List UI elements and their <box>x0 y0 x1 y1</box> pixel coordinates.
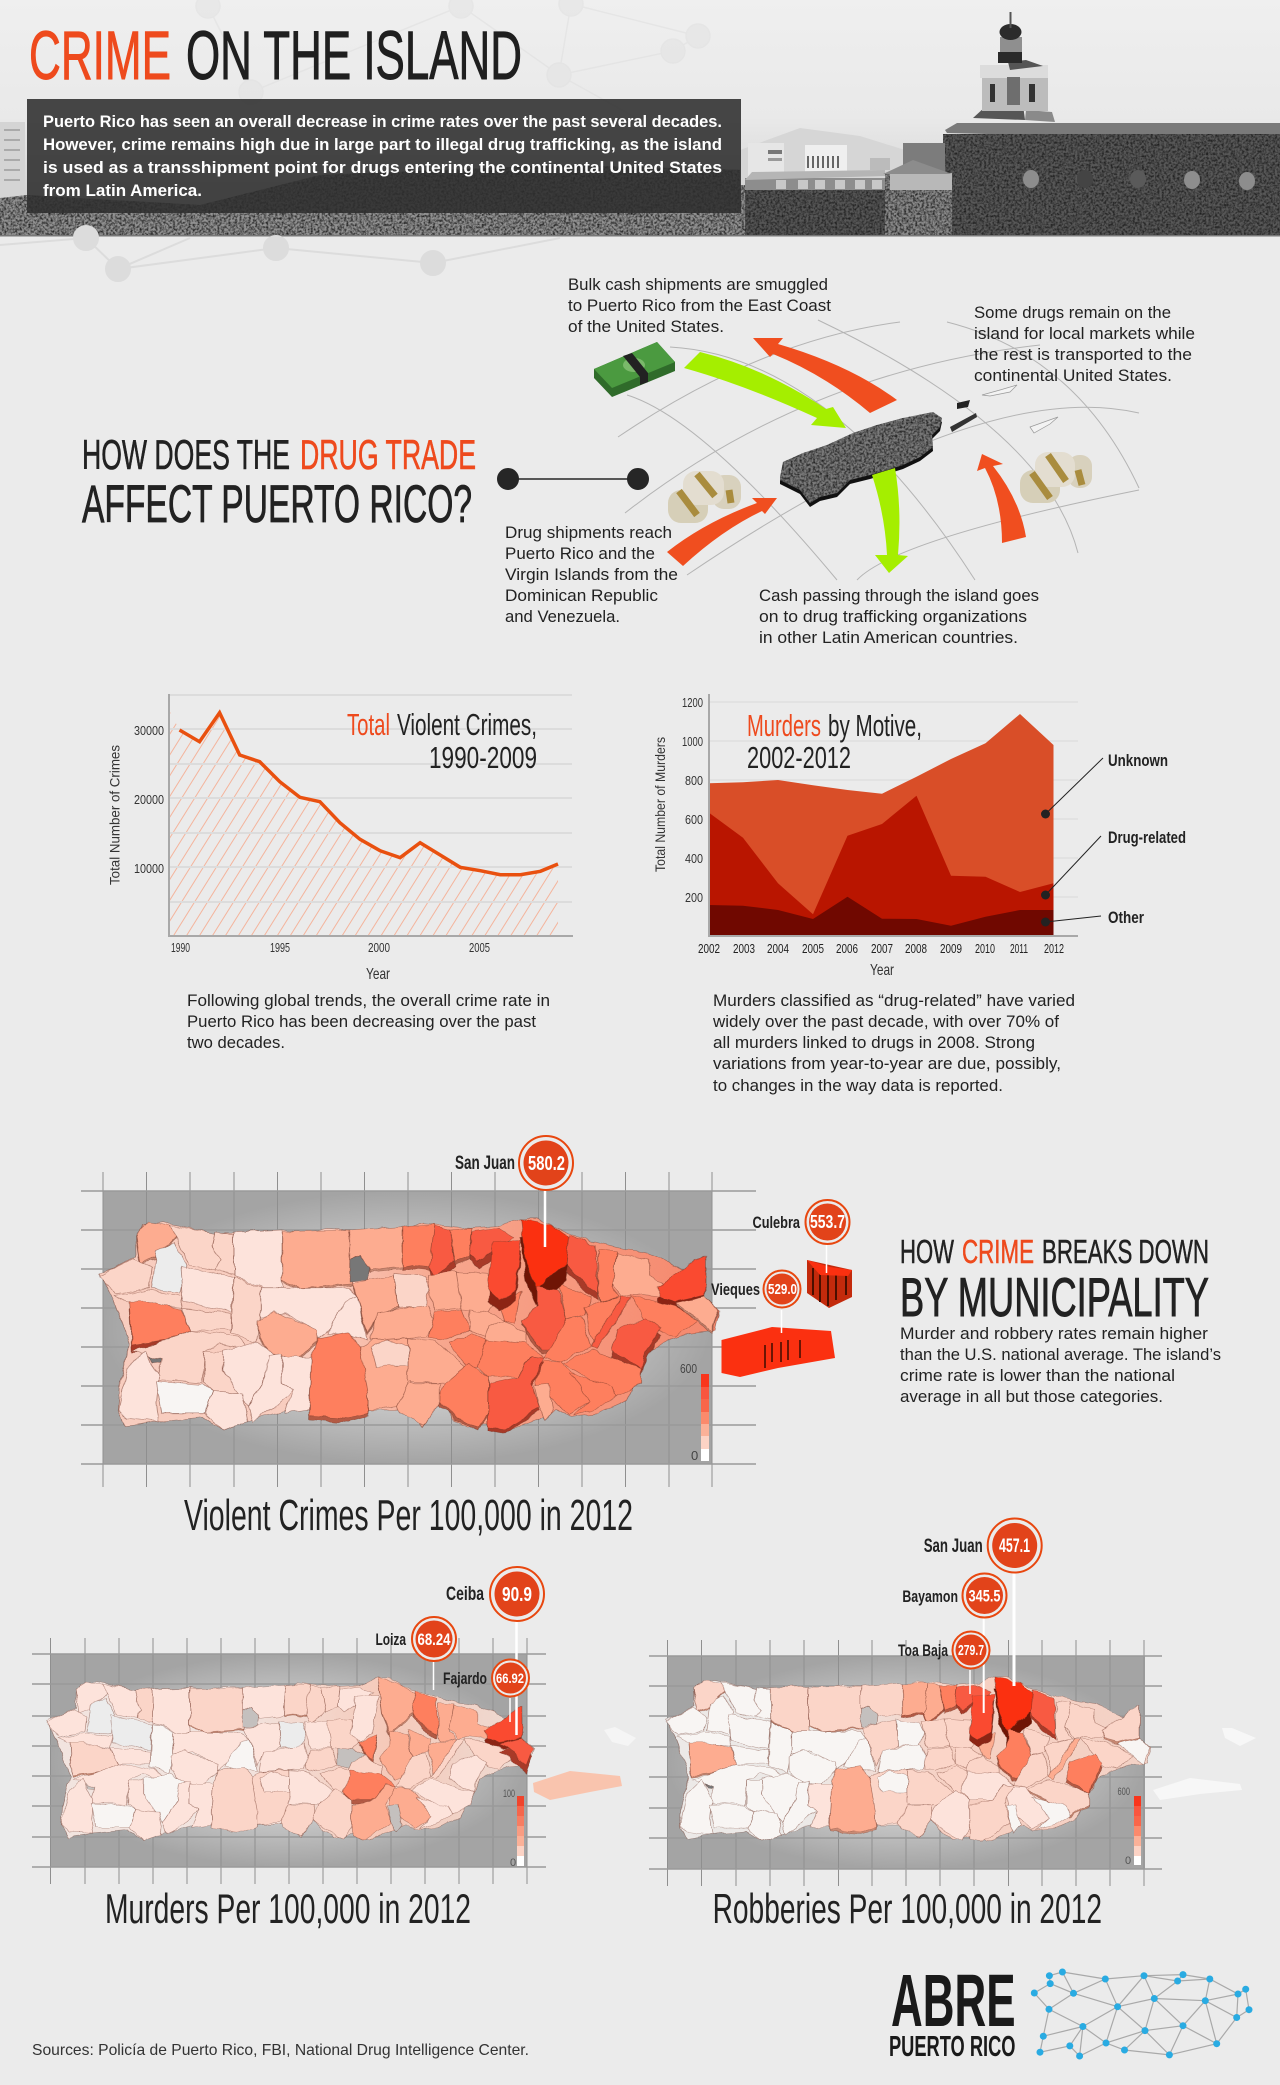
intro text box: from Latin America. <box>43 181 202 200</box>
line chart: total violent crimes: 1990-2009 <box>429 740 537 775</box>
Culebra robberies <box>1222 1728 1256 1746</box>
icon: network map of the island <box>1031 1968 1252 2060</box>
legend: 100 <box>503 1788 515 1800</box>
island of Puerto Rico <box>780 385 1058 507</box>
callout: Ceiba: 90.9 <box>502 1584 532 1606</box>
line chart: total violent crimes: Total <box>347 707 390 742</box>
area chart: murders by motive: Year <box>870 962 894 979</box>
text: some drugs: the rest is transported to the <box>974 346 1192 364</box>
text: some drugs <box>974 304 1195 385</box>
callout: San Juan violent crimes <box>455 1136 573 1247</box>
callout: Vieques: 529.0 <box>768 1281 797 1298</box>
header photo: fort and city <box>0 0 1280 236</box>
callout: unknown <box>1041 751 1168 818</box>
arrow: green cash outbound <box>872 468 908 573</box>
text: cash passing: on to drug trafficking organizations <box>759 608 1027 626</box>
text: cash passing <box>759 587 1039 647</box>
Vieques extruded <box>722 1327 835 1377</box>
Vieques murders <box>533 1771 622 1800</box>
line chart: total violent crimes: Total Number of Crimes <box>106 745 122 885</box>
logo: Abre Puerto Rico <box>889 1959 1252 2063</box>
line chart: total violent crimes: 2000 <box>368 940 390 955</box>
line chart: total violent crimes: Violent Crimes, <box>397 707 537 742</box>
text: chart 1 note: Puerto Rico has been decreasing over the past <box>187 1013 536 1031</box>
area chart: murders by motive: 2012 <box>1044 941 1064 956</box>
callout: Fajardo: Fajardo <box>443 1669 487 1688</box>
drug route map <box>594 320 1139 580</box>
area chart: murders by motive: 2009 <box>940 941 962 956</box>
left wall with crenels <box>745 170 887 236</box>
area chart: murders by motive: 2007 <box>871 941 893 956</box>
round bastion <box>883 160 952 236</box>
callout: San Juan robberies <box>924 1518 1042 1686</box>
callout: San Juan violent crimes: San Juan <box>455 1153 515 1174</box>
text: drug shipments: Virgin Islands from the <box>505 566 678 584</box>
heading: drug trade: HOW DOES THE <box>82 431 290 478</box>
title: CRIME <box>29 17 171 94</box>
area chart: murders by motive: 1200 <box>682 695 703 710</box>
arrow: red drugs north <box>977 454 1026 543</box>
callout: other <box>1041 908 1144 927</box>
callout: Loiza <box>376 1617 456 1690</box>
legend <box>680 1361 709 1463</box>
callout: San Juan robberies: 457.1 <box>999 1536 1030 1557</box>
callout: Toa Baja <box>898 1632 990 1694</box>
text: bulk cash: Bulk cash shipments are smuggled <box>568 276 828 294</box>
decorative network below header <box>0 226 560 281</box>
callout: San Juan robberies: San Juan <box>924 1536 983 1557</box>
callout: other: Other <box>1108 908 1144 927</box>
area chart: murders by motive: 800 <box>685 773 703 788</box>
text: drug shipments: and Venezuela. <box>505 608 620 626</box>
title <box>29 17 522 94</box>
text: cash passing: in other Latin American countries. <box>759 629 1018 647</box>
area chart: murders by motive: 2008 <box>905 941 927 956</box>
heading: by municipality: CRIME <box>962 1233 1034 1270</box>
area chart: murders by motive: 2004 <box>767 941 789 956</box>
text: chart 2 note: variations from year-to-year are due, possibly, <box>713 1055 1061 1073</box>
text: bulk cash: of the United States. <box>568 318 724 336</box>
arrow: red cash to coast <box>753 338 897 413</box>
heading: drug trade: AFFECT PUERTO RICO? <box>82 475 472 534</box>
text: some drugs: island for local markets while <box>974 325 1195 343</box>
line chart: total violent crimes: 1995 <box>270 940 290 955</box>
callout: Toa Baja: 279.7 <box>958 1642 984 1659</box>
callout: Ceiba: Ceiba <box>446 1584 484 1605</box>
arrow: green cash inbound <box>684 352 846 428</box>
area chart: murders by motive: 200 <box>685 890 703 905</box>
map panel: murders <box>32 1638 636 1884</box>
heading: by municipality: HOW <box>900 1233 955 1270</box>
area chart: murders by motive: 1000 <box>682 734 703 749</box>
text: municipality note: Murder and robbery rates remain higher <box>900 1325 1209 1343</box>
callout: Vieques: Vieques <box>711 1280 760 1299</box>
callout: Fajardo: 66.92 <box>496 1670 524 1686</box>
area chart: murders by motive: 2002-2012 <box>747 740 851 775</box>
text: municipality note <box>900 1325 1221 1406</box>
line chart: total violent crimes: 1990 <box>171 940 190 955</box>
callout: San Juan violent crimes: 580.2 <box>528 1153 565 1175</box>
legend: 0 <box>691 1448 698 1463</box>
Vieques robberies <box>1153 1778 1242 1800</box>
sources: Sources: Policía de Puerto Rico, FBI, National Drug Intelligence Center. <box>32 2042 529 2059</box>
text: municipality note: crime rate is lower than the national <box>900 1367 1175 1385</box>
line chart: total violent crimes: 30000 <box>134 723 164 738</box>
line chart: total violent crimes <box>106 694 573 983</box>
logo: Abre Puerto Rico: PUERTO RICO <box>889 2031 1016 2063</box>
text: some drugs: continental United States. <box>974 367 1172 385</box>
arrow: red drugs inbound <box>667 498 777 566</box>
text: cash passing: Cash passing through the island goes <box>759 587 1039 605</box>
main fort wall <box>903 123 1280 236</box>
legend: 0 <box>510 1857 516 1869</box>
text: municipality note: than the U.S. national average. The island’s <box>900 1346 1221 1364</box>
text: chart 1 note <box>187 992 550 1052</box>
heading: by municipality <box>900 1233 1209 1328</box>
area chart: murders by motive: by Motive, <box>828 708 922 743</box>
connector <box>498 468 648 490</box>
area: drug-related <box>709 796 1054 936</box>
callout: Loiza: Loiza <box>376 1630 406 1649</box>
text: chart 2 note <box>712 992 1075 1095</box>
text: drug shipments: Drug shipments reach <box>505 524 672 542</box>
map panel: robberies <box>649 1640 1256 1886</box>
line chart: total violent crimes: 10000 <box>134 861 164 876</box>
map title: robberies: Robberies Per 100,000 in 2012 <box>713 1885 1102 1932</box>
intro text box: is used as a transshipment point for drugs entering the continental United States <box>43 158 722 177</box>
left building and city strip <box>0 122 745 236</box>
text: chart 2 note: Murders classified as “drug-related” have varied <box>713 992 1075 1010</box>
area chart: murders by motive <box>652 694 1186 979</box>
text: chart 2 note: widely over the past decade, with over 70% of <box>712 1013 1059 1031</box>
area chart: murders by motive: Murders <box>747 708 821 743</box>
callout: Fajardo <box>443 1660 529 1722</box>
callout: Culebra <box>752 1200 850 1273</box>
area chart: murders by motive: 2003 <box>733 941 755 956</box>
Culebra extruded <box>807 1260 852 1308</box>
icon: drug bales right <box>1020 452 1092 503</box>
line chart: total violent crimes: Year <box>366 966 390 983</box>
icon: drug bales left <box>668 471 741 523</box>
legend: 600 <box>1118 1786 1130 1798</box>
area chart: murders by motive: 2010 <box>975 941 995 956</box>
callout: Bayamon: 345.5 <box>968 1586 1000 1606</box>
text: municipality note: average in all but those categories. <box>900 1388 1163 1406</box>
map title: violent crimes: Violent Crimes Per 100,000 in 2012 <box>184 1491 633 1540</box>
callout: Culebra: 553.7 <box>810 1212 845 1232</box>
legend <box>1118 1786 1141 1867</box>
legend <box>503 1788 524 1869</box>
title: ON THE ISLAND <box>186 17 522 94</box>
intro text box <box>27 99 741 213</box>
text: bulk cash: to Puerto Rico from the East Coast <box>568 297 831 315</box>
callout: Vieques <box>711 1270 800 1333</box>
line chart: total violent crimes: 2005 <box>469 940 490 955</box>
area chart: murders by motive: 600 <box>685 812 703 827</box>
text: chart 1 note: two decades. <box>187 1034 285 1052</box>
area chart: murders by motive: 2006 <box>836 941 858 956</box>
legend: 600 <box>680 1361 697 1376</box>
text: chart 1 note: Following global trends, the overall crime rate in <box>187 992 550 1010</box>
logo: Abre Puerto Rico: ABRE <box>891 1959 1016 2042</box>
city buildings behind the fort <box>740 128 905 185</box>
area: other <box>709 897 1054 936</box>
heading: drug trade <box>82 431 476 534</box>
callout: drug-related <box>1041 828 1186 900</box>
callout: Toa Baja: Toa Baja <box>898 1641 948 1660</box>
text: some drugs: Some drugs remain on the <box>974 304 1171 322</box>
callout: Bayamon: Bayamon <box>902 1587 958 1606</box>
text: chart 2 note: to changes in the way data is reported. <box>713 1077 1003 1095</box>
callout: Loiza: 68.24 <box>418 1630 451 1649</box>
callout: Bayamon <box>902 1574 1006 1713</box>
callout: unknown: Unknown <box>1108 751 1168 770</box>
intro text box: However, crime remains high due in large part to illegal drug trafficking, as the island <box>43 135 722 154</box>
text: chart 2 note: all murders linked to drugs in 2008. Strong <box>713 1034 1035 1052</box>
callout: drug-related: Drug-related <box>1108 828 1186 847</box>
intro text box: Puerto Rico has seen an overall decrease in crime rates over the past several decades. <box>43 112 722 131</box>
text: drug shipments <box>505 524 678 626</box>
map panel: violent crimes <box>81 1172 852 1487</box>
text: drug shipments: Puerto Rico and the <box>505 545 655 563</box>
lighthouse <box>973 12 1055 122</box>
map title: murders: Murders Per 100,000 in 2012 <box>105 1885 471 1932</box>
text: drug shipments: Dominican Republic <box>505 587 658 605</box>
callout: Ceiba <box>446 1567 544 1735</box>
area chart: murders by motive: Total Number of Murders <box>652 737 668 872</box>
Culebra murders <box>604 1727 636 1746</box>
callout: Culebra: Culebra <box>752 1213 800 1232</box>
area chart: murders by motive: 2011 <box>1010 941 1028 956</box>
text: bulk cash <box>568 276 831 336</box>
area chart: murders by motive: 400 <box>685 851 703 866</box>
area: unknown <box>709 714 1054 936</box>
heading: drug trade: DRUG TRADE <box>300 431 476 478</box>
legend: 0 <box>1125 1855 1131 1867</box>
line chart: total violent crimes: 20000 <box>134 792 164 807</box>
area chart: murders by motive: 2005 <box>802 941 824 956</box>
icon: cash bundle <box>594 342 675 397</box>
area chart: murders by motive: 2002 <box>698 941 720 956</box>
